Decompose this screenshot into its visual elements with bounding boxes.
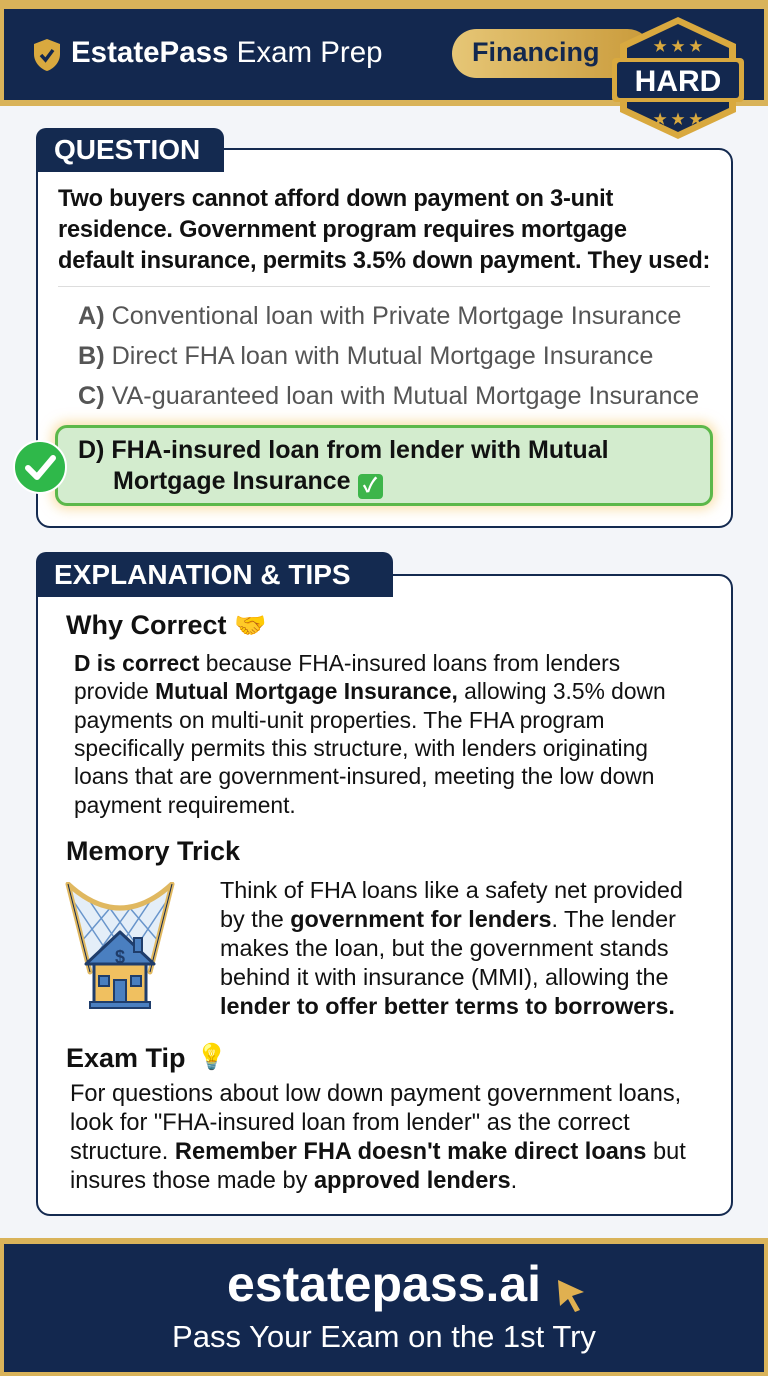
why correct text: payment requirement. (74, 792, 296, 818)
options: A) Conventional loan with Private Mortgage Insurance (78, 302, 681, 330)
icon: light bulb: 💡 (196, 1043, 227, 1071)
text: residence. Government program requires mortgage (58, 217, 627, 243)
exam tip text (70, 1081, 686, 1194)
why correct heading: Why Correct (66, 610, 227, 640)
exam tip text: look for "FHA-insured loan from lender" as the correct (70, 1110, 630, 1136)
why correct text: provide Mutual Mortgage Insurance, allowing 3.5% down (74, 678, 666, 704)
correct answer D: Mortgage Insurance (113, 467, 351, 495)
heading: question tab (36, 128, 224, 172)
category pill (452, 29, 652, 78)
correct answer D: D) FHA-insured loan from lender with Mutual (78, 436, 609, 464)
memory trick text: makes the loan, but the government stands (220, 935, 669, 961)
icon: shield (34, 39, 60, 71)
heading: explanation tab (36, 552, 393, 597)
heading: explanation tab: EXPLANATION & TIPS (54, 559, 351, 590)
correct answer D: ✓ (363, 475, 377, 497)
icon: cursor (558, 1280, 584, 1312)
difficulty badge: ★ ★ ★ (653, 111, 703, 127)
correct answer D (55, 425, 713, 506)
memory trick text: behind it with insurance (MMI), allowing the (220, 964, 669, 990)
panel: explanation (36, 574, 733, 1216)
exam tip heading: Exam Tip (66, 1043, 186, 1073)
memory trick text (220, 877, 683, 1019)
icon: handshake: 🤝 (234, 610, 266, 640)
why correct text: specifically permits this structure, with lenders originating (74, 735, 648, 761)
memory trick text: lender to offer better terms to borrowers. (220, 993, 675, 1019)
options: C) VA-guaranteed loan with Mutual Mortgage Insurance (78, 382, 699, 410)
why correct text: D is correct because FHA-insured loans from lenders (74, 650, 620, 676)
memory trick text: by the government for lenders. The lender (220, 906, 676, 932)
icon: check circle (13, 440, 67, 494)
options: B) Direct FHA loan with Mutual Mortgage Insurance (78, 342, 653, 370)
panel: question (36, 148, 733, 528)
memory trick text: Think of FHA loans like a safety net provided (220, 877, 683, 903)
why correct text: payments on multi-unit properties. The FHA program (74, 707, 604, 733)
question text (58, 186, 710, 274)
text: Two buyers cannot afford down payment on 3-unit (58, 186, 613, 212)
exam tip text: For questions about low down payment government loans, (70, 1081, 681, 1107)
footer (0, 1238, 768, 1376)
category pill: Financing (472, 37, 600, 67)
footer url: estatepass.ai (227, 1256, 541, 1312)
heading: question tab: QUESTION (54, 134, 200, 165)
icon: house in safety net (66, 882, 174, 1009)
exam tip text: insures those made by approved lenders. (70, 1168, 517, 1194)
why correct text: loans that are government-insured, meeting the low down (74, 763, 654, 789)
difficulty badge: HARD (635, 65, 721, 98)
logo: EstatePass Exam Prep (71, 36, 383, 69)
difficulty badge (612, 17, 744, 139)
memory trick heading: Memory Trick (66, 836, 240, 866)
exam tip text: structure. Remember FHA doesn't make direct loans but (70, 1139, 686, 1165)
text: default insurance, permits 3.5% down payment. They used: (58, 248, 710, 274)
header bar (0, 0, 768, 106)
options (78, 302, 699, 410)
icon: house in safety net: $ (115, 947, 125, 967)
why correct text (74, 650, 666, 818)
difficulty badge: ★ ★ ★ (653, 38, 703, 54)
tagline: Pass Your Exam on the 1st Try (172, 1319, 596, 1354)
